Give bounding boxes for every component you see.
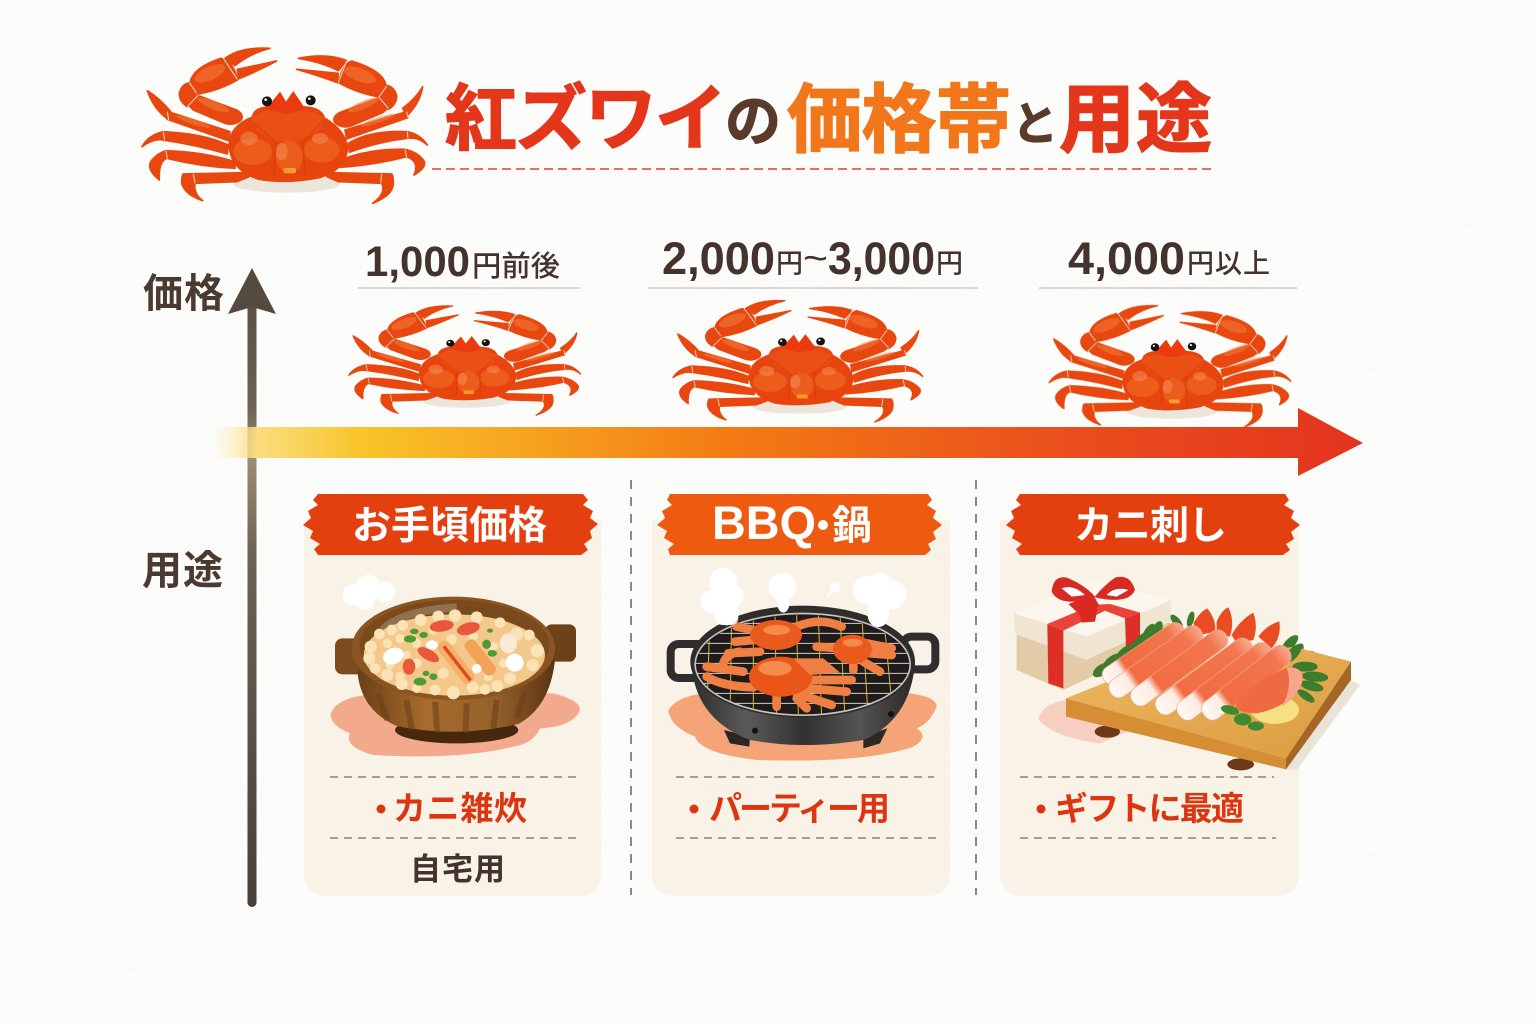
panel: affordable price (303, 494, 598, 889)
illustration: crabs on a grill (668, 568, 937, 761)
panel: BBQ and hot pot (657, 493, 942, 838)
vertical arrow: price axis (228, 268, 276, 907)
text: ideal for gifts (1020, 777, 1276, 838)
icon: large crab beside title (142, 48, 427, 203)
panel: crab sashimi (1006, 494, 1360, 838)
title: 紅ズワイ (445, 60, 727, 165)
text: crab porridge: 自宅用 (410, 844, 505, 889)
title: と (1012, 88, 1058, 154)
price label: 2000 to 3000 yen: 3,000 (828, 233, 935, 284)
price label: 4000 yen and up: 円以上 (1187, 242, 1270, 281)
illustration: gift box and sashimi platter (1014, 577, 1360, 770)
title (445, 58, 1212, 168)
text: party use: パーティー用 (709, 782, 890, 830)
crab sticks (1099, 619, 1295, 724)
ribbon: affordable price (303, 494, 598, 555)
ribbon: BBQ and hot pot (657, 493, 942, 555)
icon: crab for 4000 yen tier (1049, 306, 1291, 427)
icon: crab for 2000-3000 yen tier (673, 301, 923, 422)
price label: 2000 to 3000 yen: 円 (776, 242, 803, 281)
ribbon: BBQ and hot pot: BBQ (712, 496, 816, 549)
title: の (725, 77, 781, 158)
dashed column dividers (631, 480, 976, 895)
axis label: price: 価格 (143, 261, 224, 319)
price label: 2000 to 3000 yen: 円 (936, 242, 963, 281)
axis label: usage: 用途 (142, 538, 223, 596)
price label: around 1000 yen: 1,000 (365, 238, 470, 286)
icon: crab for 1000 yen tier (349, 306, 581, 415)
price label: 2000 to 3000 yen: ~ (803, 238, 828, 280)
horizontal arrow: price increasing (215, 408, 1363, 476)
price label: 2000 to 3000 yen (648, 233, 978, 289)
price label: 2000 to 3000 yen: 2,000 (662, 233, 775, 284)
text: crab porridge: カニ雑炊 (393, 782, 527, 830)
text: party use (676, 777, 936, 838)
text: ideal for gifts: ギフトに最適 (1055, 782, 1244, 830)
text: crab porridge (330, 777, 582, 889)
ribbon: crab sashimi: カニ刺し (1074, 495, 1227, 551)
illustration: crab rice porridge pot (331, 575, 580, 756)
title: 価格帯 (787, 59, 1011, 168)
title: 用途 (1059, 58, 1212, 168)
price label: around 1000 yen: 円前後 (472, 243, 560, 285)
price label: 4000 yen and up (1039, 233, 1297, 289)
ribbon: BBQ and hot pot: 鍋 (832, 493, 872, 551)
ribbon: crab sashimi (1006, 494, 1300, 555)
ribbon: affordable price: お手頃価格 (352, 495, 547, 551)
price label: 4000 yen and up: 4,000 (1068, 233, 1185, 284)
price label: around 1000 yen (358, 238, 580, 289)
panel backgrounds (304, 520, 1299, 896)
